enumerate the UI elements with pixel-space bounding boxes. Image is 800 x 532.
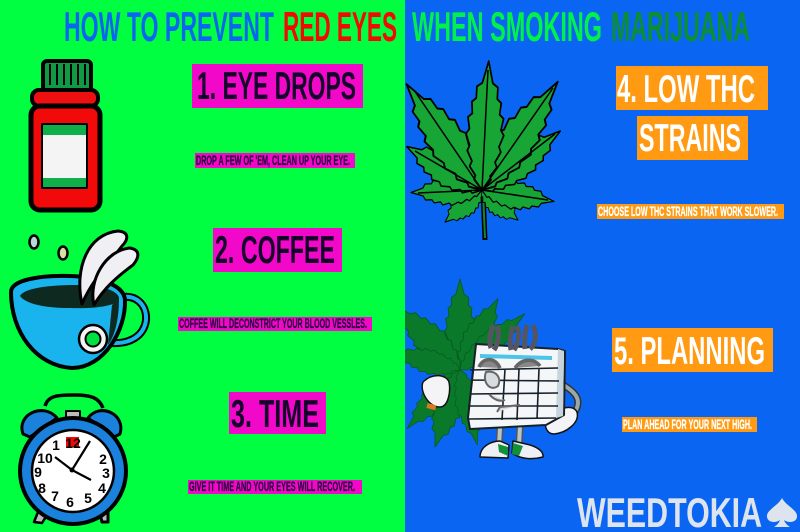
clock numerals [34,435,110,510]
description: time: GIVE IT TIME AND YOUR EYES WILL RECOVER. [189,479,355,494]
heading box: 1. eye drops: 1. EYE DROPS [197,65,356,108]
icon: coffee cup [11,231,146,368]
description: coffee: COFFEE WILL DECONSTRICT YOUR BLOOD VESSLES. [179,316,367,331]
heading box: 1. eye drops [192,64,363,108]
heading box: 3. time [229,392,326,436]
clock numerals: 6 [66,494,74,510]
heading box: 4. low thc strains [616,66,768,160]
icon part: calendar page [468,344,565,429]
icon: eye drop bottle [31,61,100,210]
title [64,3,750,50]
heading box: 3. time: 3. TIME [231,393,319,436]
description: coffee [178,316,372,331]
icon: spade [767,498,797,527]
clock numerals: 5 [84,490,92,506]
clock numerals: 9 [34,464,42,480]
heading box: 2. coffee: 2. COFFEE [215,229,335,272]
description: time [188,479,362,494]
icon: alarm clock [20,395,126,524]
clock numerals: 12 [65,435,81,451]
description: eye drops: DROP A FEW OF 'EM, CLEAN UP YOUR EYE. [196,153,350,168]
clock numerals: 1 [52,437,60,453]
title: RED EYES [283,3,397,50]
clock numerals: 4 [98,480,106,496]
description: eye drops [195,153,355,168]
clock numerals: 8 [38,480,46,496]
clock numerals: 10 [37,450,53,466]
icon part: arms and hands [422,376,578,434]
icon part: calendar rings [490,325,535,350]
heading box: 2. coffee [213,228,342,272]
icon: calendar mascot with leaf [385,279,578,459]
icon part: calendar legs and shoes [480,426,543,459]
icon part: dark cannabis leaf [405,278,526,448]
panel: green left background [0,0,405,532]
icon part: beans [30,236,68,260]
clock numerals: 3 [102,465,110,481]
clock numerals: 2 [99,451,107,467]
title: WHEN SMOKING [412,3,602,50]
clock numerals: 7 [51,488,59,504]
title: HOW TO PREVENT [64,3,274,50]
panel: blue right background [405,0,800,532]
icon: cannabis leaf [390,60,574,240]
